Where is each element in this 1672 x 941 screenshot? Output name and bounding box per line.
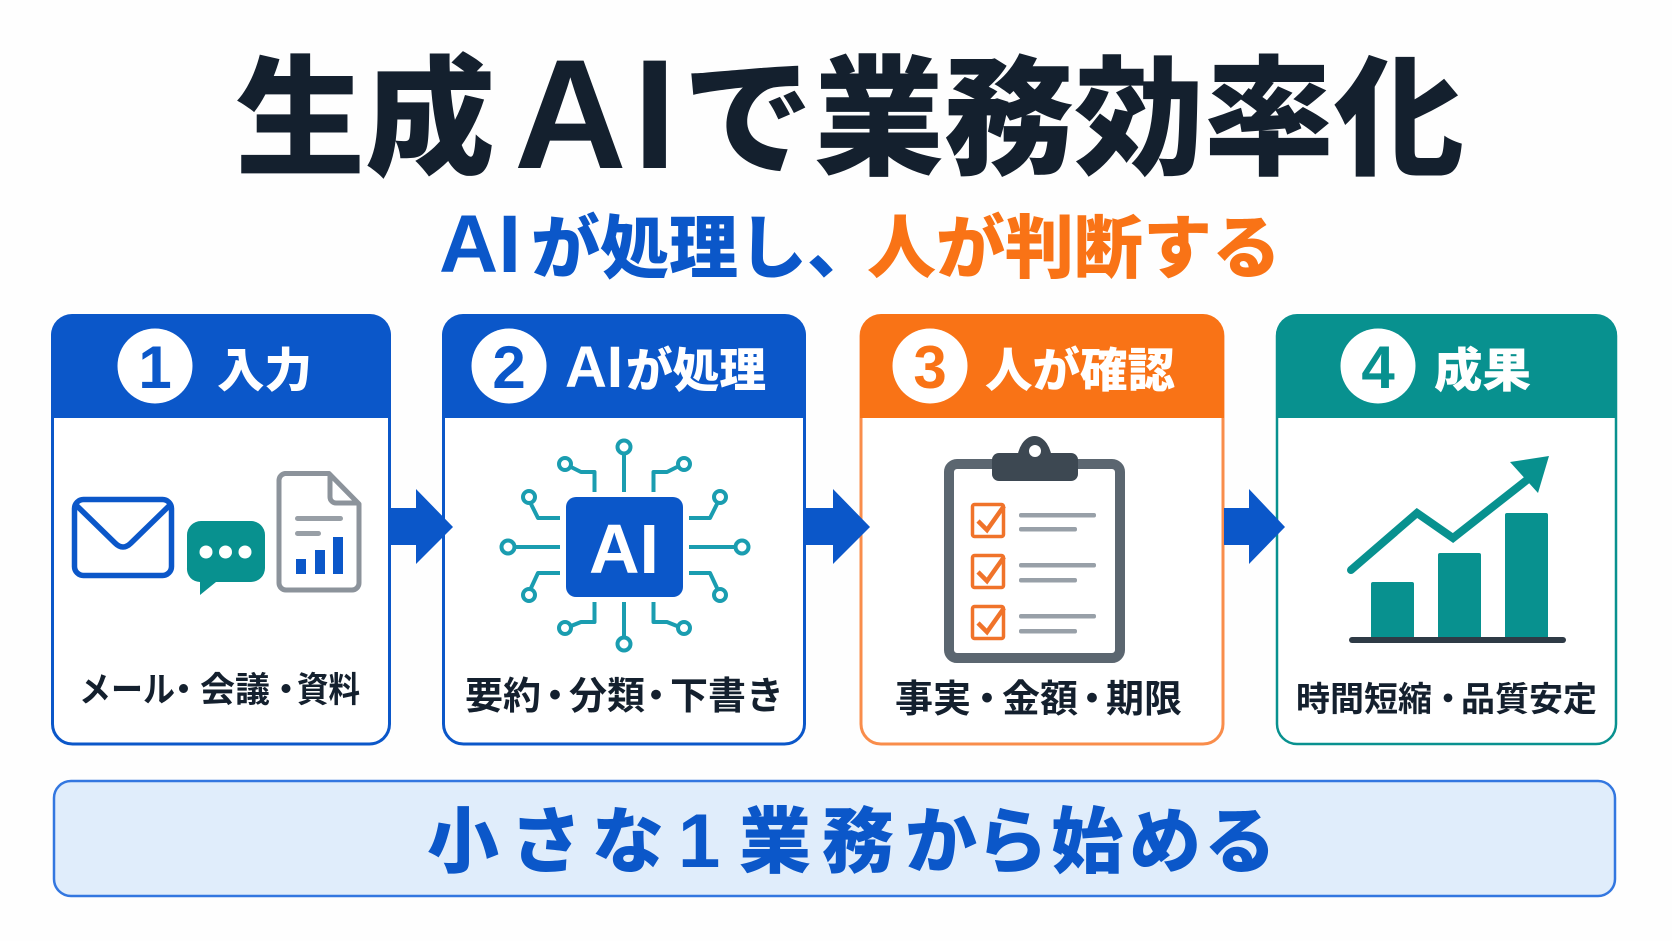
caption: step 2: ・ <box>637 665 675 720</box>
title: 生成 <box>235 14 495 202</box>
caption: step 4: ・ <box>1431 672 1465 721</box>
caption: step 1: 資料 <box>297 662 360 713</box>
banner: call to action: な <box>592 783 664 888</box>
arrow: step 3 to 4 <box>1224 489 1285 564</box>
icon: document with chart <box>279 474 359 590</box>
caption: step 4: 時間短縮 <box>1296 672 1432 721</box>
header: step 2: AI <box>565 335 623 400</box>
banner: call to action: 業 <box>739 783 811 888</box>
caption: step 1: ・ <box>268 662 304 713</box>
arrow: step 2 to 3 <box>806 489 870 564</box>
header: step 2 <box>442 314 806 418</box>
subtitle: AI <box>439 199 521 290</box>
caption: step 1: 会議 <box>200 662 270 713</box>
icon: clipboard checklist <box>949 436 1120 658</box>
header: step 3 <box>860 314 1224 418</box>
checklist row 3 <box>972 606 1096 638</box>
header: step 2: 2 <box>492 334 526 401</box>
banner: call to action: か <box>905 783 977 888</box>
panel: step 4 results <box>1276 314 1617 744</box>
banner: call to action <box>54 781 1615 896</box>
checklist row 2 <box>972 556 1096 588</box>
header: step 3: 人が確認 <box>985 332 1175 401</box>
title: 業務効率化 <box>814 14 1464 202</box>
panel: step 2 AI processing <box>442 314 806 744</box>
banner: call to action: ら <box>976 783 1048 888</box>
header: step 4 <box>1276 314 1617 418</box>
caption: step 4: 品質安定 <box>1461 672 1597 721</box>
header: step 4: 成果 <box>1434 332 1531 401</box>
header: step 1: 入力 <box>217 332 312 401</box>
caption: step 2: 分類 <box>569 665 645 720</box>
caption: step 2: ・ <box>536 665 574 720</box>
checklist row 1 <box>972 504 1096 536</box>
arrow: step 1 to 2 <box>391 489 453 564</box>
caption: step 3: ・ <box>968 668 1006 723</box>
subtitle: が処理し、 <box>531 192 876 292</box>
icon: AI chip with circuits: AI <box>589 510 659 588</box>
banner: call to action: さ <box>510 783 582 888</box>
caption: step 3: 期限 <box>1106 668 1182 723</box>
caption: step 2: 要約 <box>465 665 541 720</box>
caption: step 3: 事実 <box>895 668 971 723</box>
header: step 4: 4 <box>1361 334 1395 401</box>
title: A <box>514 28 627 202</box>
subtitle <box>439 192 1281 292</box>
icon: AI chip with circuits <box>502 440 748 650</box>
icon: chat bubble <box>187 521 265 595</box>
title: I <box>633 28 676 202</box>
icon: growth bar chart <box>1349 456 1566 643</box>
panel: step 3 human check <box>860 314 1224 744</box>
caption: step 3: 金額 <box>1002 668 1078 723</box>
banner: call to action: る <box>1204 783 1276 888</box>
caption: step 1: メール <box>79 662 175 713</box>
caption: step 3: ・ <box>1073 668 1111 723</box>
header: step 2: が処理 <box>626 332 766 401</box>
header: step 1: 1 <box>138 334 172 401</box>
subtitle: 人が判断する <box>867 192 1281 292</box>
header: step 1 <box>51 314 391 418</box>
title <box>235 14 1464 202</box>
title: で <box>683 14 813 202</box>
banner: call to action: 始 <box>1051 783 1123 888</box>
panel: step 1 input <box>51 314 391 744</box>
caption: step 1: ・ <box>166 662 201 713</box>
caption: step 2: 下書き <box>670 665 784 720</box>
banner: call to action: め <box>1129 783 1201 888</box>
header: step 3: 3 <box>913 334 947 401</box>
banner: call to action: 務 <box>822 783 894 888</box>
banner: call to action: 小 <box>427 783 499 888</box>
banner: call to action: 1 <box>678 799 720 884</box>
icon: envelope <box>74 500 172 576</box>
